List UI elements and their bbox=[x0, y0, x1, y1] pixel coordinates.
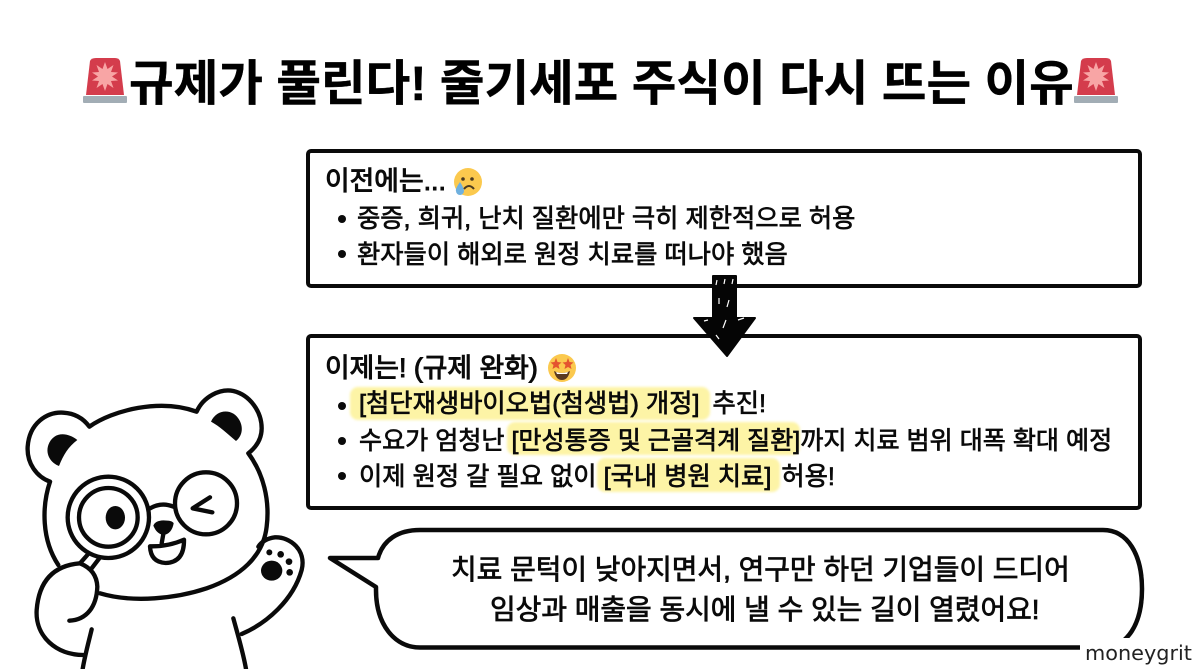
speech bubble bbox=[328, 528, 1144, 650]
icon: siren left bbox=[83, 58, 127, 103]
icon: siren right bbox=[1074, 58, 1118, 103]
icon: star-eyes face bbox=[548, 354, 576, 382]
title bbox=[83, 57, 1118, 111]
bullet list: after bbox=[338, 386, 1112, 494]
icon: crying face bbox=[454, 168, 482, 196]
heading: after: 이제는! (규제 완화) bbox=[325, 353, 538, 383]
bullet list: before: 환자들이 해외로 원정 치료를 떠나야 했음 bbox=[357, 241, 788, 269]
bullet list: after: [첨단재생바이오법(첨생법) 개정] 추진! bbox=[359, 390, 766, 418]
bubble text: 치료 문턱이 낮아지면서, 연구만 하던 기업들이 드디어 bbox=[451, 554, 1070, 585]
bullet list: before bbox=[338, 205, 855, 269]
watermark text: moneygrit bbox=[1085, 641, 1192, 665]
title text: 규제가 풀린다! 줄기세포 주식이 다시 뜨는 이유 bbox=[129, 57, 1074, 111]
bullet list: after: 수요가 엄청난 [만성통증 및 근골격계 질환]까지 치료 범위 대폭 확대 예정 bbox=[359, 427, 1112, 455]
watermark bbox=[1080, 638, 1200, 669]
bullet list: before: 중증, 희귀, 난치 질환에만 극히 제한적으로 허용 bbox=[357, 205, 855, 233]
bear mascot bbox=[25, 388, 305, 669]
panel: before bbox=[306, 149, 1142, 288]
bubble shape bbox=[328, 528, 1144, 650]
heading: before: 이전에는... bbox=[325, 166, 446, 196]
panel: after bbox=[306, 334, 1142, 510]
arrow: down bbox=[693, 275, 756, 357]
bullet list: after: 이제 원정 갈 필요 없이 [국내 병원 치료] 허용! bbox=[359, 463, 835, 491]
bubble text bbox=[451, 554, 1070, 625]
bubble text: 임상과 매출을 동시에 낼 수 있는 길이 열렸어요! bbox=[490, 594, 1040, 625]
